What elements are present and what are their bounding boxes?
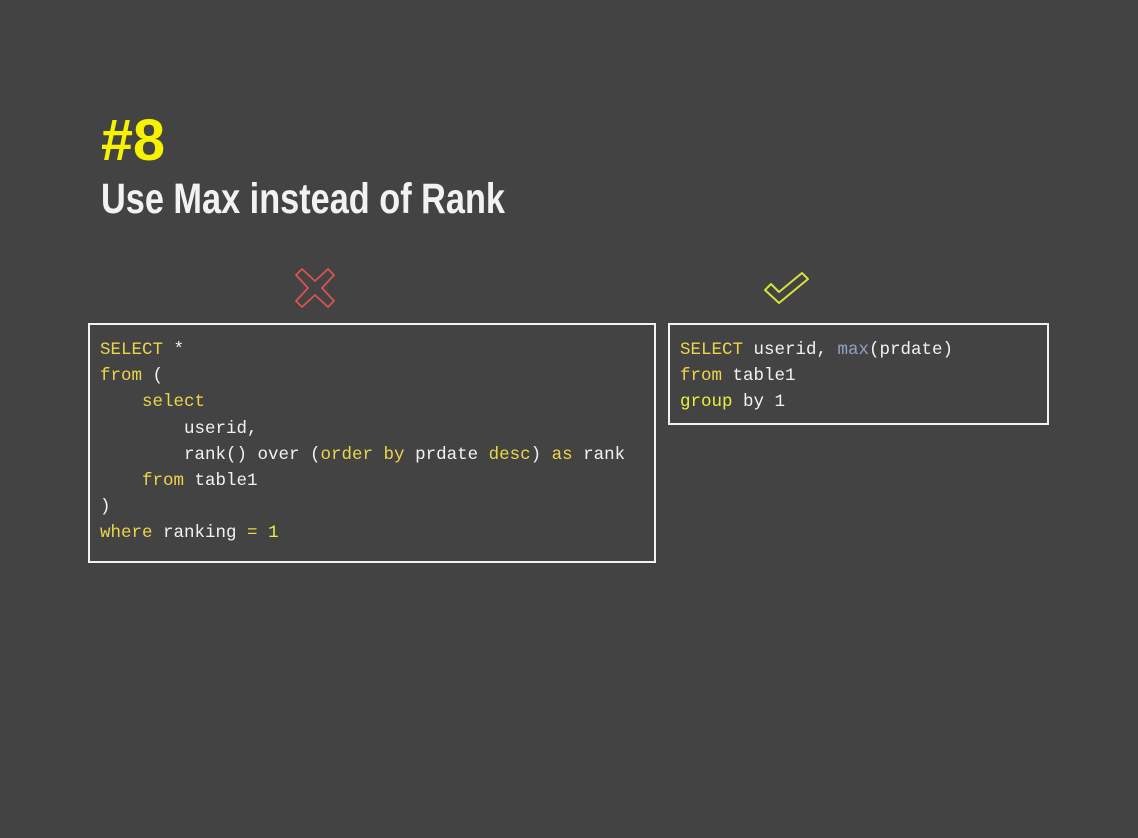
icon: green check [764,272,809,304]
panel: max query (good) [668,323,1049,425]
code: max query: SELECT userid, max(prdate) from table1 group by 1 [680,340,953,412]
icon: red cross [295,268,335,308]
code: rank query: SELECT * from ( select userid, rank() over (order by prdate desc) as rank from table1 ) where ranking = 1 [100,340,625,543]
number: #8 [101,108,165,173]
title block [101,108,505,223]
panel: rank query (bad) [88,323,656,563]
heading: Use Max instead of Rank [101,175,505,223]
